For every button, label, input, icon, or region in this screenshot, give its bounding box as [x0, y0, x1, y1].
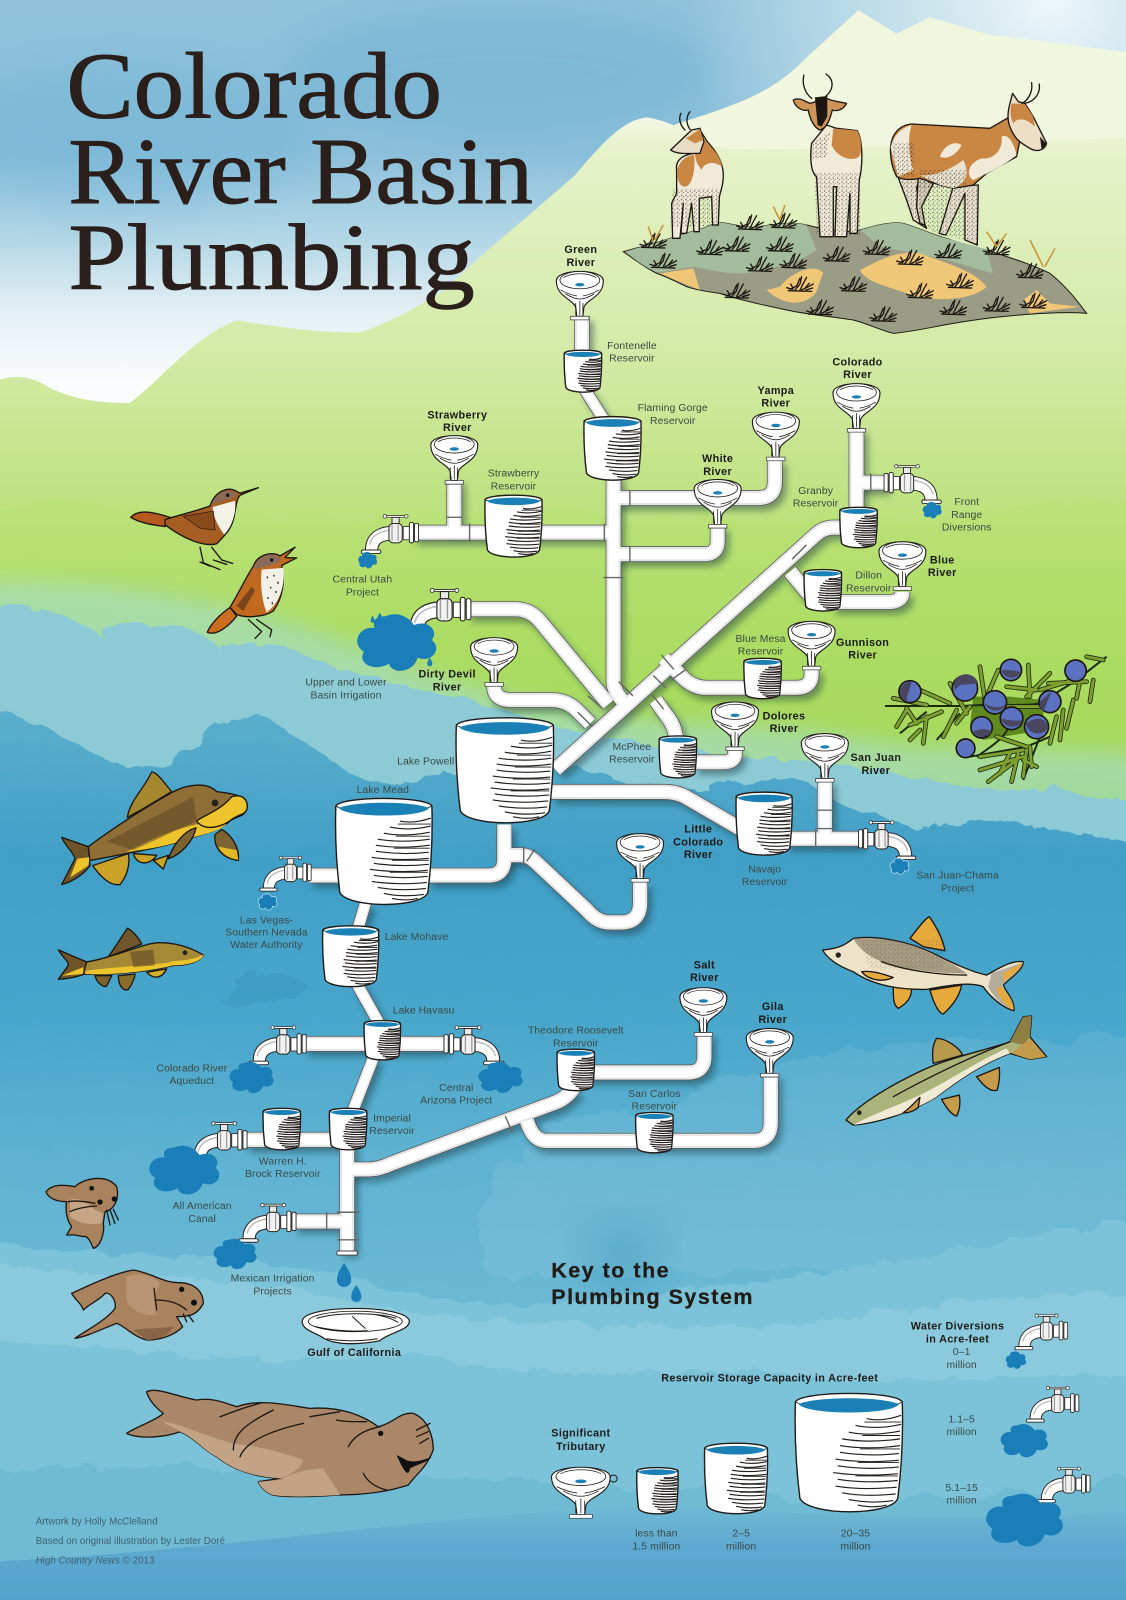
key: medium diversion: million — [947, 1427, 977, 1438]
labels: upper basin: Gunnison — [836, 637, 889, 649]
labels: lower basin: Reservoir — [369, 1126, 415, 1137]
labels: upper basin: Dolores — [763, 710, 805, 722]
labels: upper basin: Range — [951, 510, 982, 521]
labels: middle basin: San Juan-Chama — [916, 871, 999, 882]
fish: chub — [823, 917, 1023, 1014]
reservoir: Flaming Gorge — [584, 417, 641, 480]
tributary funnel: Dirty Devil River — [471, 638, 518, 686]
labels: lower basin: Gulf of California — [307, 1347, 402, 1359]
key: medium reservoir — [705, 1443, 768, 1552]
faucet: Central Utah — [361, 515, 419, 553]
key: tributary: Tributary — [556, 1441, 606, 1453]
key: medium diversion — [947, 1386, 1079, 1457]
labels: lower basin: San Carlos — [628, 1089, 681, 1100]
fish: pikeminnow — [846, 1016, 1047, 1125]
tributary funnel: San Juan River — [801, 734, 848, 782]
labels: middle basin: Lake Mead — [357, 785, 409, 796]
labels: middle basin: Lake Powell — [397, 756, 454, 767]
labels: upper basin: Central Utah — [333, 575, 392, 586]
key: large reservoir: 20–35 — [841, 1529, 870, 1540]
labels: middle basin: Water Authority — [230, 940, 303, 951]
labels: lower basin: Theodore Roosevelt — [528, 1026, 624, 1037]
key: small diversion: 0–1 — [953, 1347, 970, 1358]
labels: upper basin: River — [443, 422, 472, 434]
water splash: Central Arizona — [478, 1062, 523, 1093]
antelope: center — [793, 74, 862, 237]
water drops above gulf — [337, 1263, 361, 1302]
reservoir: Theodore Roosevelt — [557, 1049, 594, 1091]
water splash: Las Vegas — [258, 894, 277, 910]
tributary funnel: Blue River — [879, 542, 926, 590]
title — [66, 34, 533, 310]
labels: upper basin: Reservoir — [738, 647, 784, 658]
credits: Artwork by Holly McClelland — [36, 1516, 158, 1527]
faucet: San Juan-Chama — [859, 821, 916, 860]
reservoir: Lake Powell — [456, 718, 554, 823]
hill — [623, 205, 1087, 333]
labels: upper basin: Colorado — [832, 356, 883, 368]
reservoir: Navajo — [736, 792, 792, 855]
faucet: Upper and Lower Basin — [405, 588, 471, 633]
key: diversions heading: in Acre-feet — [926, 1333, 989, 1345]
birds and left fish — [58, 488, 297, 990]
labels: lower basin — [156, 959, 788, 1359]
title: Colorado — [66, 34, 442, 138]
credits: High Country News © 2013 — [36, 1555, 155, 1566]
labels: upper basin: Green — [564, 244, 597, 256]
labels: middle basin: River — [684, 849, 713, 861]
seal: resting — [72, 1270, 203, 1340]
labels: upper basin: Blue Mesa — [735, 634, 786, 645]
water splash: All American Canal — [149, 1146, 219, 1195]
labels: upper basin: Yampa — [758, 385, 794, 397]
labels: middle basin: Lake Havasu — [393, 1005, 455, 1016]
reservoir: Imperial — [329, 1108, 367, 1150]
tributary funnel: Gunnison River — [788, 621, 835, 670]
labels: upper basin: Reservoir — [650, 416, 696, 427]
reservoir: Lake Mohave — [323, 926, 379, 987]
faucet: Mexican Irrigation — [239, 1203, 296, 1242]
labels: upper basin: River — [928, 567, 957, 579]
labels: upper basin: Strawberry — [427, 409, 487, 421]
faucet: All American Canal — [190, 1122, 247, 1161]
key: large reservoir — [795, 1393, 903, 1552]
key: large diversion — [945, 1467, 1090, 1546]
labels: upper basin: Dirty Devil — [418, 669, 476, 681]
labels: lower basin: Gila — [762, 1001, 784, 1013]
labels: lower basin: Colorado River — [156, 1063, 227, 1074]
key: tributary — [551, 1428, 617, 1518]
labels: lower basin: Brock Reservoir — [245, 1169, 321, 1180]
labels: lower basin: Imperial — [373, 1113, 411, 1124]
labels: upper basin: San Juan — [850, 752, 901, 764]
key: tributary: Significant — [551, 1428, 610, 1440]
tributary funnel: Strawberry River — [431, 436, 478, 484]
labels: upper basin: Fontenelle — [607, 341, 657, 352]
pipes network — [245, 316, 907, 1258]
reservoir: Granby — [840, 507, 877, 548]
fish: carp — [62, 772, 247, 885]
labels: upper basin: Reservoir — [793, 499, 839, 510]
tributary funnel: Gila River — [746, 1029, 793, 1077]
tributary funnel: Colorado River — [833, 384, 880, 432]
labels: upper basin: McPhee — [613, 742, 651, 753]
key: large reservoir: million — [840, 1541, 871, 1552]
labels: upper basin: Strawberry — [488, 469, 539, 480]
antelope: right large — [890, 83, 1047, 245]
labels: middle basin: Reservoir — [742, 877, 788, 888]
tributary funnel: Salt River — [680, 988, 727, 1036]
credits: Based on original illustration by Lester Doré — [36, 1536, 225, 1547]
labels: middle basin — [225, 756, 999, 1016]
labels: upper basin: River — [861, 765, 891, 777]
labels: lower basin: Salt — [694, 959, 715, 971]
labels: upper basin: River — [770, 723, 799, 735]
labels: upper basin: Front — [954, 497, 979, 508]
panel: key to the plumbing system — [551, 1259, 1090, 1552]
faucet: Front Range — [884, 465, 941, 503]
labels: upper basin: River — [761, 398, 791, 410]
key heading: Plumbing System — [551, 1285, 754, 1309]
water splash: Central Utah — [358, 552, 377, 568]
water splash: Mexican Irrigation — [214, 1239, 257, 1269]
key: small diversion: million — [947, 1360, 977, 1371]
labels: middle basin: Southern Nevada — [225, 928, 308, 939]
labels: lower basin: Canal — [188, 1214, 216, 1225]
reservoir: Warren H. Brock — [263, 1108, 300, 1150]
bowl: Gulf of California — [302, 1308, 409, 1344]
labels: lower basin: River — [690, 972, 719, 984]
labels: lower basin: River — [758, 1014, 788, 1026]
labels: middle basin: Lake Mohave — [385, 932, 448, 943]
seal: pup — [46, 1178, 118, 1248]
key: small reservoir — [632, 1468, 681, 1552]
key: large diversion: 5.1–15 — [945, 1483, 978, 1494]
labels: middle basin: Las Vegas- — [240, 915, 293, 926]
labels: lower basin: Central — [439, 1083, 473, 1094]
reservoir: Dillon — [804, 570, 842, 611]
title: Plumbing — [68, 206, 475, 310]
labels: upper basin — [305, 244, 992, 777]
tributary funnel: Little Colorado River — [617, 834, 664, 882]
reservoir: Lake Mead — [336, 798, 432, 904]
bird: canyon wren — [131, 488, 258, 570]
faucet: Las Vegas — [260, 856, 311, 891]
labels: upper basin: Blue — [930, 554, 955, 566]
tributary funnel: White River — [694, 480, 741, 528]
antelope: small left — [670, 112, 723, 238]
labels: lower basin: Warren H. — [259, 1156, 307, 1167]
reservoir: San Carlos — [636, 1112, 673, 1153]
labels: upper basin: River — [433, 681, 462, 693]
labels: upper basin: River — [848, 650, 877, 662]
labels: middle basin: Project — [941, 883, 974, 894]
key: medium reservoir: 2–5 — [732, 1529, 750, 1540]
water splash: Front Range — [923, 502, 942, 518]
plant: juniper branch with berries — [885, 657, 1107, 782]
reservoir: Strawberry — [485, 495, 542, 557]
labels: upper basin: River — [566, 257, 596, 269]
labels: upper basin: Flaming Gorge — [638, 403, 708, 414]
labels: middle basin: Little — [684, 824, 712, 836]
labels: upper basin: Reservoir — [846, 583, 892, 594]
seal: elephant seal — [127, 1390, 433, 1497]
labels: upper basin: Reservoir — [609, 354, 655, 365]
labels: middle basin: Colorado — [673, 836, 723, 848]
right fish — [823, 917, 1047, 1125]
tributary funnel: Yampa River — [752, 412, 799, 461]
water splash: San Juan-Chama — [890, 858, 909, 874]
bird: song sparrow — [207, 547, 297, 638]
key: reservoir capacity heading: Reservoir Storage Capacity in Acre-feet — [661, 1373, 878, 1385]
labels: upper basin: Project — [346, 587, 379, 598]
reservoir: Fontenelle — [564, 350, 602, 392]
labels: lower basin: Mexican Irrigation — [231, 1274, 315, 1285]
labels: lower basin: Aqueduct — [170, 1076, 214, 1087]
labels: upper basin: Basin Irrigation — [311, 690, 382, 701]
labels: middle basin: Navajo — [748, 864, 781, 875]
faucet: Central Arizona — [444, 1026, 504, 1065]
labels: upper basin: Diversions — [942, 523, 992, 534]
key: diversions heading: Water Diversions — [911, 1321, 1004, 1333]
labels: upper basin: River — [703, 466, 732, 478]
faucet: Colorado River Aqueduct — [249, 1026, 306, 1065]
key: small reservoir: 1.5 million — [632, 1541, 681, 1552]
tributary funnel: Green River — [556, 271, 603, 320]
water splash: Upper and Lower Basin — [357, 613, 436, 671]
water splash: Colorado River Aqueduct — [229, 1062, 274, 1093]
labels: upper basin: Dillon — [855, 571, 882, 582]
tributary funnel: Dolores River — [712, 702, 758, 751]
labels: upper basin: Reservoir — [491, 481, 537, 492]
key: large diversion: million — [947, 1496, 977, 1507]
labels: upper basin: Reservoir — [609, 755, 655, 766]
labels: lower basin: All American — [173, 1201, 232, 1212]
reservoir: Lake Havasu — [364, 1021, 401, 1060]
labels: upper basin: Granby — [798, 486, 833, 497]
seals — [46, 1178, 433, 1497]
key: small diversion — [947, 1314, 1068, 1371]
labels: upper basin: River — [843, 369, 872, 381]
title: River Basin — [68, 120, 533, 224]
key: medium reservoir: million — [726, 1541, 756, 1552]
reservoir: McPhee — [659, 736, 697, 778]
fish: sucker — [58, 928, 203, 990]
labels: lower basin: Projects — [253, 1286, 292, 1297]
credits — [36, 1516, 225, 1566]
labels: lower basin: Arizona Project — [420, 1096, 492, 1107]
key heading: Key to the — [551, 1259, 670, 1283]
labels: lower basin: Reservoir — [553, 1038, 599, 1049]
labels: upper basin: Upper and Lower — [305, 678, 387, 689]
labels: lower basin: Reservoir — [632, 1102, 678, 1113]
illustration: pronghorn antelope on hill — [623, 74, 1087, 333]
reservoir: Blue Mesa — [744, 658, 781, 699]
labels: upper basin: White — [702, 453, 733, 465]
key: medium diversion: 1.1–5 — [948, 1414, 975, 1425]
key: small reservoir: less than — [635, 1529, 678, 1540]
